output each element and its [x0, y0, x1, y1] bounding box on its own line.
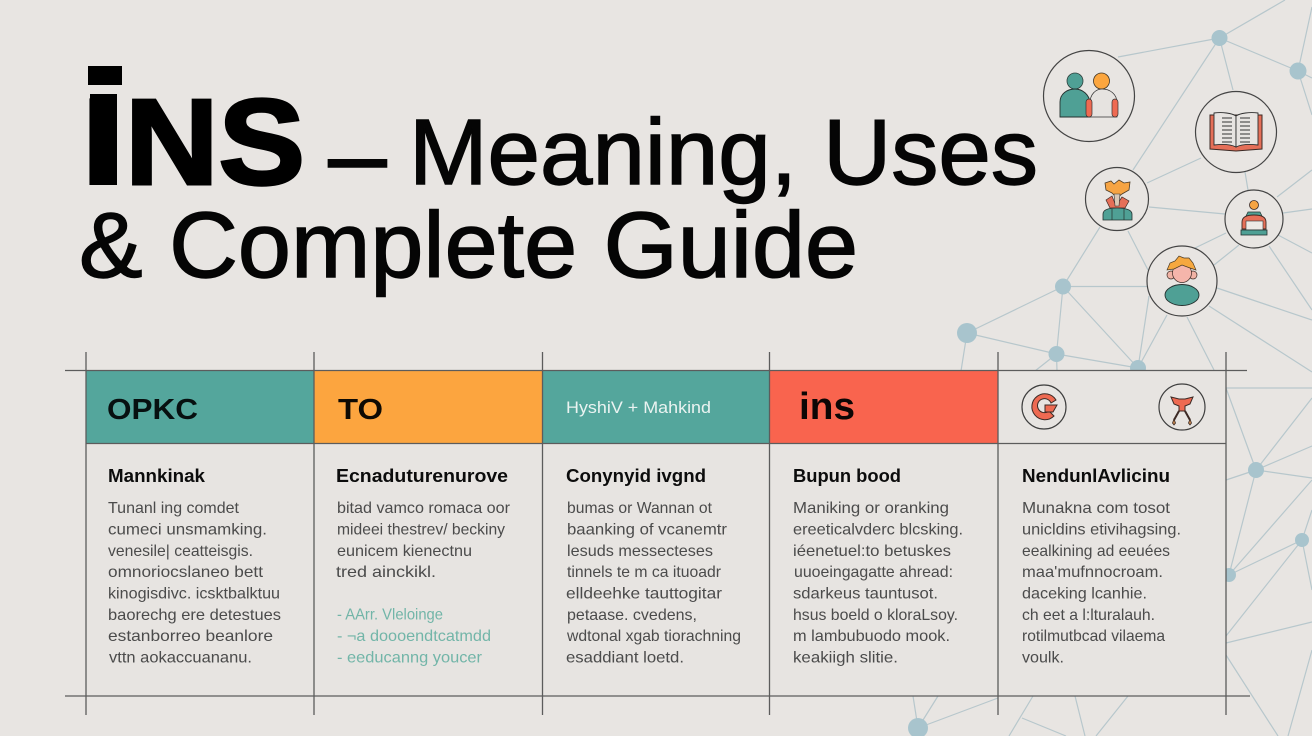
column 2 text — [336, 466, 511, 666]
table panel background — [86, 371, 1226, 696]
column 4 text: iéenetuel:to betuskes — [793, 543, 951, 560]
column 4 text: sdarkeus tauntusot. — [793, 586, 938, 602]
icon: header figure — [1159, 384, 1205, 430]
column 1 text: venesile| ceatteisgis. — [108, 543, 253, 560]
column 5 text — [1022, 466, 1181, 666]
column 1 text: omnoriocslaneo bett — [108, 564, 264, 581]
column 5 text: Munakna com tosot — [1022, 500, 1171, 517]
column 4 text: Maniking or oranking — [793, 500, 949, 517]
column 1 text: vttn aokaccuananu. — [109, 650, 252, 666]
column 2 text: eunicem kienectnu — [337, 543, 472, 560]
column 3 text: tinnels te m ca ituoadr — [567, 564, 722, 581]
column 4 text: m lambubuodo mook. — [793, 628, 950, 645]
column 5 text: unicldins etivihagsing. — [1022, 522, 1181, 538]
column 1 text: baorechg ere detestues — [108, 607, 281, 624]
icon: header coral C — [1022, 385, 1066, 429]
column 2 text: tred ainckikl. — [336, 564, 436, 581]
column 3 text: esaddiant loetd. — [566, 650, 684, 666]
column 2 text: mideei thestrev/ beckiny — [337, 522, 505, 538]
green list — [337, 606, 491, 666]
column 1 text: Mannkinak — [108, 466, 206, 486]
icon: person at laptop — [1225, 190, 1283, 248]
column 1 text: Tunanl ing comdet — [108, 500, 240, 517]
column 5 text: voulk. — [1022, 650, 1064, 666]
column 1 text: kinogisdivc. icsktbalktuu — [108, 586, 280, 602]
column 5 text: maa'mufnnocroam. — [1022, 564, 1163, 581]
header: orange TO: TO — [338, 394, 383, 426]
column 2 text: bitad vamco romaca oor — [337, 500, 511, 517]
column 1 text — [108, 466, 281, 666]
title line one: Meaning, Uses — [409, 100, 1038, 204]
column 5 text: eealkining ad eeuées — [1022, 543, 1170, 560]
table — [65, 352, 1250, 715]
title word: iNS: i — [78, 37, 124, 220]
header: teal Hyshi — [542, 371, 770, 444]
green list: - AArr. Vleloinge — [337, 606, 443, 624]
title word: iNS: NS — [125, 74, 305, 210]
title word: iNS — [78, 37, 305, 220]
green list: - eeducanng youcer — [337, 650, 483, 666]
column 5 text: NendunlAvlicinu — [1022, 466, 1170, 486]
header: teal OPKC — [86, 371, 314, 444]
header: teal Hyshi: HyshiV + Mahkind — [566, 398, 711, 417]
column 4 text: hsus boeld o kloraLsoy. — [793, 607, 958, 624]
column 4 text: keakiigh slitie. — [793, 650, 898, 666]
column 3 text — [566, 466, 741, 666]
column 4 text: uuoeingagatte ahread: — [794, 564, 953, 581]
column 4 text: ereeticalvderc blcsking. — [793, 522, 963, 538]
column 3 text: elldeehke tauttogitar — [566, 586, 723, 602]
column 3 text: baanking of vcanemtr — [567, 522, 728, 538]
column 5 text: ch eet a l:lturalauh. — [1022, 607, 1155, 624]
column 3 text: lesuds messecteses — [567, 543, 713, 560]
green list: - ¬a doooendtcatmdd — [337, 628, 491, 645]
header: coral ins — [770, 371, 998, 444]
column 1 text: estanborreo beanlore — [108, 628, 273, 645]
column 5 text: rotilmutbcad vilaema — [1022, 628, 1165, 645]
column 3 text: bumas or Wannan ot — [567, 500, 713, 517]
column 3 text: Conynyid ivgnd — [566, 466, 706, 486]
title line one: – — [329, 103, 386, 207]
header: coral ins: ins — [799, 386, 855, 428]
column 4 text — [793, 466, 963, 666]
column 3 text: petaase. cvedens, — [567, 607, 697, 624]
column 2 text: Ecnaduturenurove — [336, 466, 508, 486]
title line two: & Complete Guide — [79, 193, 858, 297]
icon: two people — [1044, 50, 1134, 142]
header: orange TO — [314, 371, 542, 444]
icon: person with flame hair — [1086, 168, 1148, 230]
column 5 text: daceking lcanhie. — [1022, 586, 1147, 602]
network background — [908, 0, 1312, 736]
column 3 text: wdtonal xgab tiorachning — [566, 628, 741, 645]
column 4 text: Bupun bood — [793, 466, 901, 486]
column 1 text: cumeci unsmamking. — [108, 522, 267, 538]
title — [78, 37, 1038, 297]
icon: child portrait — [1147, 246, 1217, 316]
header: teal OPKC: OPKC — [107, 394, 198, 426]
icon: open book — [1196, 92, 1276, 172]
